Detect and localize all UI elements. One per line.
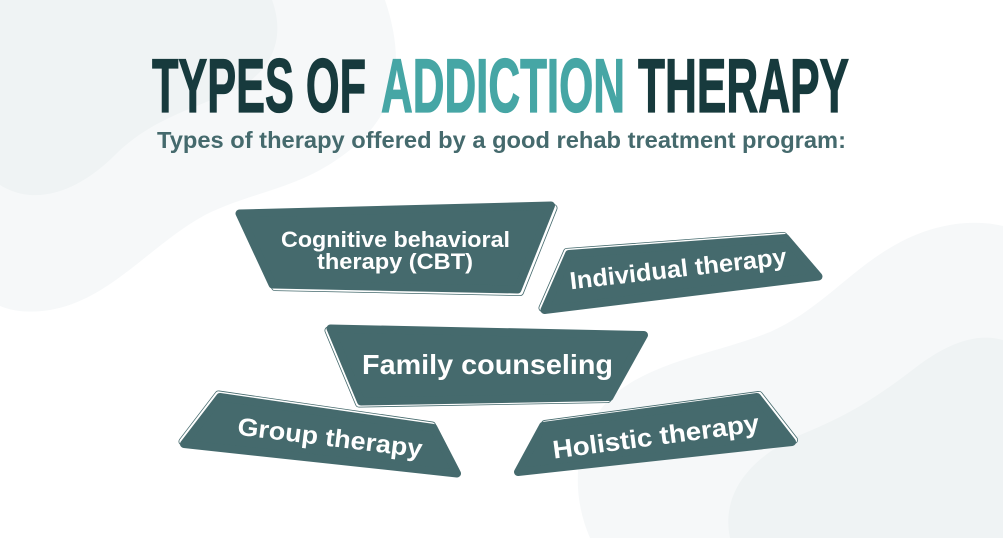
subtitle: Types of therapy offered by a good rehab treatment program: (157, 127, 846, 153)
panel: cognitive behavioral therapy (240, 206, 554, 292)
panel: holistic therapy (518, 395, 794, 472)
panel: cognitive behavioral therapy: therapy (CBT) (317, 249, 473, 274)
panel: individual therapy (542, 236, 818, 310)
panel: group therapy (182, 394, 457, 474)
panel: cognitive behavioral therapy: Cognitive behavioral (281, 227, 510, 252)
panel: group therapy: Group therapy (236, 413, 424, 463)
panel: holistic therapy: Holistic therapy (551, 409, 762, 465)
panel: individual therapy: Individual therapy (568, 244, 788, 295)
title: THERAPY (638, 44, 849, 129)
title: ADDICTION (381, 44, 625, 129)
panel: family counseling: Family counseling (362, 349, 613, 380)
panel: family counseling (328, 328, 644, 404)
title: TYPES OF (152, 44, 366, 129)
title (152, 44, 849, 129)
